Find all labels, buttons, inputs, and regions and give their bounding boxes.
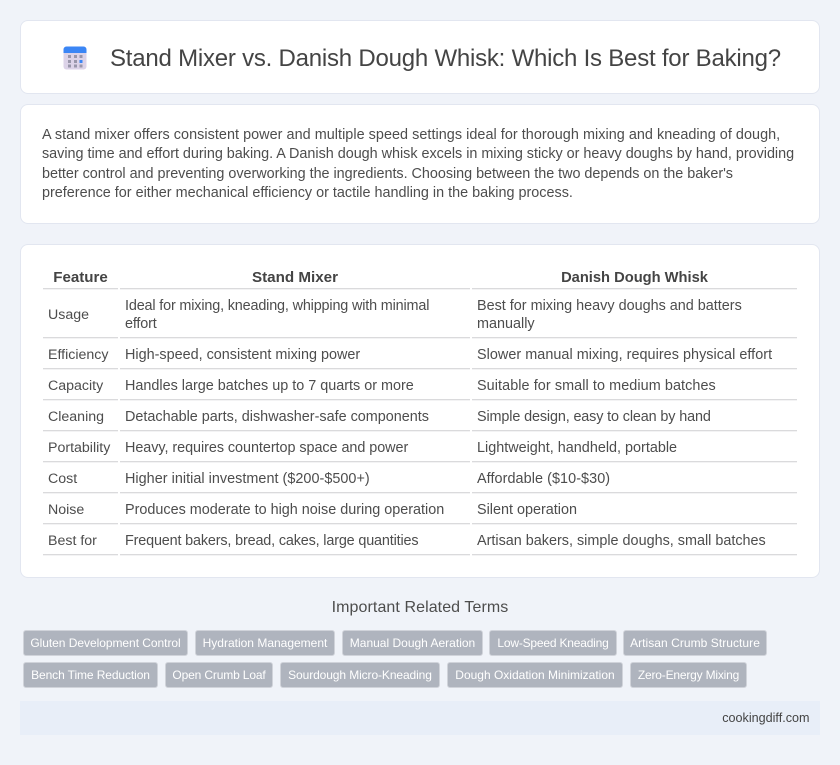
- tag: [23, 662, 158, 688]
- source text: cookingdiff.com: [722, 711, 810, 725]
- tag: Dough Oxidation Minimization: [455, 668, 615, 682]
- intro text: better control and preventing overworking the ingredients. Choosing between the two depends on the baker's: [42, 166, 733, 182]
- row: capacity: Suitable for small to medium batches: [477, 378, 716, 394]
- row: noise: Noise: [48, 502, 84, 518]
- row: noise: [48, 502, 577, 518]
- row: cost: Cost: [48, 471, 77, 487]
- row: usage: [48, 298, 742, 332]
- header panel: [20, 20, 820, 94]
- row: cleaning: Detachable parts, dishwasher-safe components: [125, 409, 429, 425]
- tag: Bench Time Reduction: [31, 668, 150, 682]
- tag: Low-Speed Kneading: [497, 636, 609, 650]
- tag: Gluten Development Control: [30, 636, 181, 650]
- tag: [165, 662, 273, 688]
- intro panel: [20, 104, 820, 224]
- row: cost: [48, 471, 610, 487]
- intro text: preference for either mechanical efficiency or tactile handling in the baking process.: [42, 185, 573, 201]
- row: noise: Produces moderate to high noise during operation: [125, 502, 444, 518]
- row: usage: manually: [477, 316, 535, 332]
- row: portability: Portability: [48, 440, 110, 456]
- tag: Open Crumb Loaf: [172, 668, 266, 682]
- row: cleaning: Cleaning: [48, 409, 104, 425]
- tag: Zero-Energy Mixing: [638, 668, 739, 682]
- tag: [342, 630, 483, 656]
- tag: [630, 662, 747, 688]
- table header: [53, 269, 708, 286]
- intro text: [42, 127, 794, 201]
- row: noise: Silent operation: [477, 502, 577, 518]
- row: efficiency: Efficiency: [48, 347, 108, 363]
- tag: [280, 662, 440, 688]
- tag: [447, 662, 623, 688]
- row: best for: Best for: [48, 533, 97, 549]
- row: portability: Heavy, requires countertop space and power: [125, 440, 408, 456]
- footer bar: [20, 701, 820, 735]
- row: best for: [48, 533, 766, 549]
- tag: [23, 630, 188, 656]
- title: Stand Mixer vs. Danish Dough Whisk: Which Is Best for Baking?: [110, 45, 781, 72]
- intro text: saving time and effort during baking. A Danish dough whisk excels in mixing sticky or heavy doughs by hand, providing: [42, 146, 794, 162]
- row: usage: Usage: [48, 307, 89, 323]
- icon: calendar: [64, 46, 86, 70]
- tag: Sourdough Micro-Kneading: [288, 668, 432, 682]
- table header: Feature: [53, 269, 108, 286]
- row: cleaning: Simple design, easy to clean by hand: [477, 409, 711, 425]
- row: usage: Ideal for mixing, kneading, whipping with minimal: [125, 298, 429, 314]
- related term tags: [23, 630, 767, 688]
- row: cost: Higher initial investment ($200-$500+): [125, 471, 370, 487]
- tag: Manual Dough Aeration: [350, 636, 475, 650]
- row: capacity: [48, 378, 716, 394]
- row: efficiency: High-speed, consistent mixing power: [125, 347, 360, 363]
- comparison table panel: [20, 244, 820, 578]
- table header: Danish Dough Whisk: [561, 270, 708, 286]
- intro text: A stand mixer offers consistent power and multiple speed settings ideal for thorough mixing and kneading of dough,: [42, 127, 780, 143]
- row: cost: Affordable ($10-$30): [477, 471, 610, 487]
- related terms heading: Important Related Terms: [332, 599, 508, 616]
- row: capacity: Handles large batches up to 7 quarts or more: [125, 378, 414, 394]
- row: best for: Artisan bakers, simple doughs, small batches: [477, 533, 766, 549]
- table header: Stand Mixer: [252, 269, 338, 286]
- row: cleaning: [48, 409, 711, 425]
- tag: Artisan Crumb Structure: [630, 636, 760, 650]
- row: capacity: Capacity: [48, 378, 103, 394]
- row: efficiency: [48, 347, 772, 363]
- row: efficiency: Slower manual mixing, requires physical effort: [477, 347, 772, 363]
- tag: [195, 630, 335, 656]
- row: usage: effort: [125, 316, 157, 332]
- row: portability: [48, 440, 677, 456]
- row: usage: Best for mixing heavy doughs and batters: [477, 298, 742, 314]
- tag: [489, 630, 617, 656]
- tag: Hydration Management: [203, 636, 327, 650]
- tag: [623, 630, 767, 656]
- row: best for: Frequent bakers, bread, cakes, large quantities: [125, 533, 418, 549]
- row: portability: Lightweight, handheld, portable: [477, 440, 677, 456]
